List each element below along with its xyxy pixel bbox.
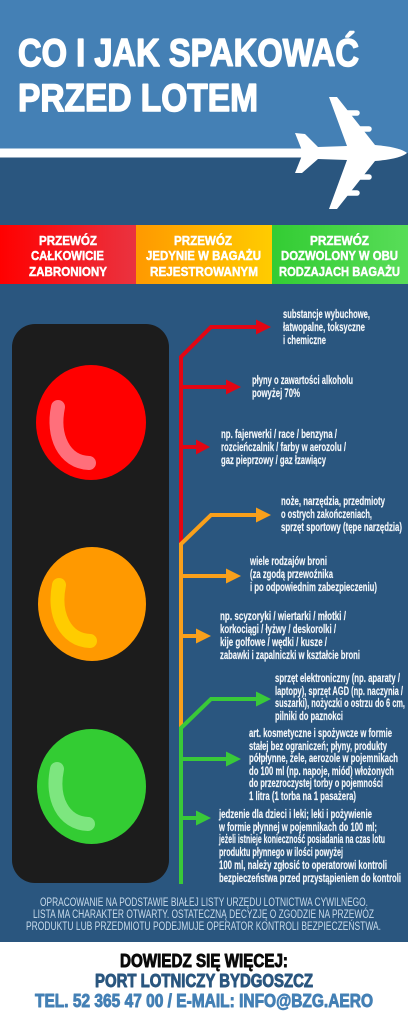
text: weapons: wiele rodzajów broni (249, 556, 327, 568)
traffic light (12, 324, 169, 883)
green lamp (37, 729, 146, 844)
green arrows (181, 692, 271, 884)
legend band: red (0, 225, 136, 284)
legend band: green (272, 225, 408, 284)
text: explosive substances: i chemiczne (283, 335, 326, 347)
text: alcohol (252, 375, 353, 400)
legend band: orange: JEDYNIE W BAGAŻU (146, 248, 261, 263)
title: PRZED LOTEM (18, 77, 258, 120)
text: baby food and medicine (218, 809, 401, 885)
text: electronics: pilniki do paznokci (275, 711, 343, 723)
text: pocket knives and sports gear: korkociągi / łyżwy / deskorolki / (220, 624, 337, 636)
orange lamp (38, 547, 146, 661)
text: pocket knives and sports gear (220, 611, 360, 662)
icon: airplane with trail (0, 97, 407, 209)
text: electronics (275, 673, 405, 723)
text: knives and tools (281, 496, 402, 534)
legend band: green: PRZEWÓZ (310, 233, 369, 248)
text: cosmetics and food (249, 728, 398, 803)
header panel (0, 0, 408, 153)
disclaimer (26, 897, 381, 933)
text: pocket knives and sports gear: kije golfowe / wędki / kusze / (220, 637, 328, 649)
contact footer: PORT LOTNICZY BYDGOSZCZ (95, 971, 313, 991)
text: explosive substances (283, 309, 370, 347)
text: alcohol: płyny o zawartości alkoholu (252, 375, 353, 387)
legend band: red: PRZEWÓZ (39, 233, 97, 248)
text: fireworks (221, 429, 347, 467)
legend band: orange (136, 225, 272, 284)
text: cosmetics and food: 1 litra (1 torba na 1 pasażera) (249, 791, 356, 803)
legend band: red: ZABRONIONY (29, 265, 108, 279)
legend band: orange: PRZEWÓZ (174, 233, 232, 248)
title (18, 31, 359, 120)
orange arrows (181, 508, 271, 728)
text: pocket knives and sports gear: np. scyzoryki / wiertarki / młotki / (220, 611, 347, 623)
text: fireworks: np. fajerwerki / race / benzyna / (221, 429, 338, 441)
text: alcohol: powyżej 70% (252, 388, 300, 400)
red lamp (36, 365, 146, 480)
legend band: red: CAŁKOWICIE (31, 249, 104, 263)
text: explosive substances: łatwopalne, toksyczne (283, 322, 365, 334)
text: weapons (249, 556, 377, 594)
contact footer: DOWIEDZ SIĘ WIĘCEJ: (120, 951, 288, 971)
legend band: green: DOZWOLONY W OBU (281, 249, 398, 263)
text: weapons: (za zgodą przewoźnika (250, 569, 333, 581)
text: fireworks: rozcieńczalnik / farby w aerozolu / (221, 442, 347, 454)
contact footer (0, 942, 408, 1024)
red arrows (181, 320, 271, 544)
legend band: orange: REJESTROWANYM (150, 265, 258, 279)
text: fireworks: gaz pieprzowy / gaz łzawiący (221, 455, 326, 467)
